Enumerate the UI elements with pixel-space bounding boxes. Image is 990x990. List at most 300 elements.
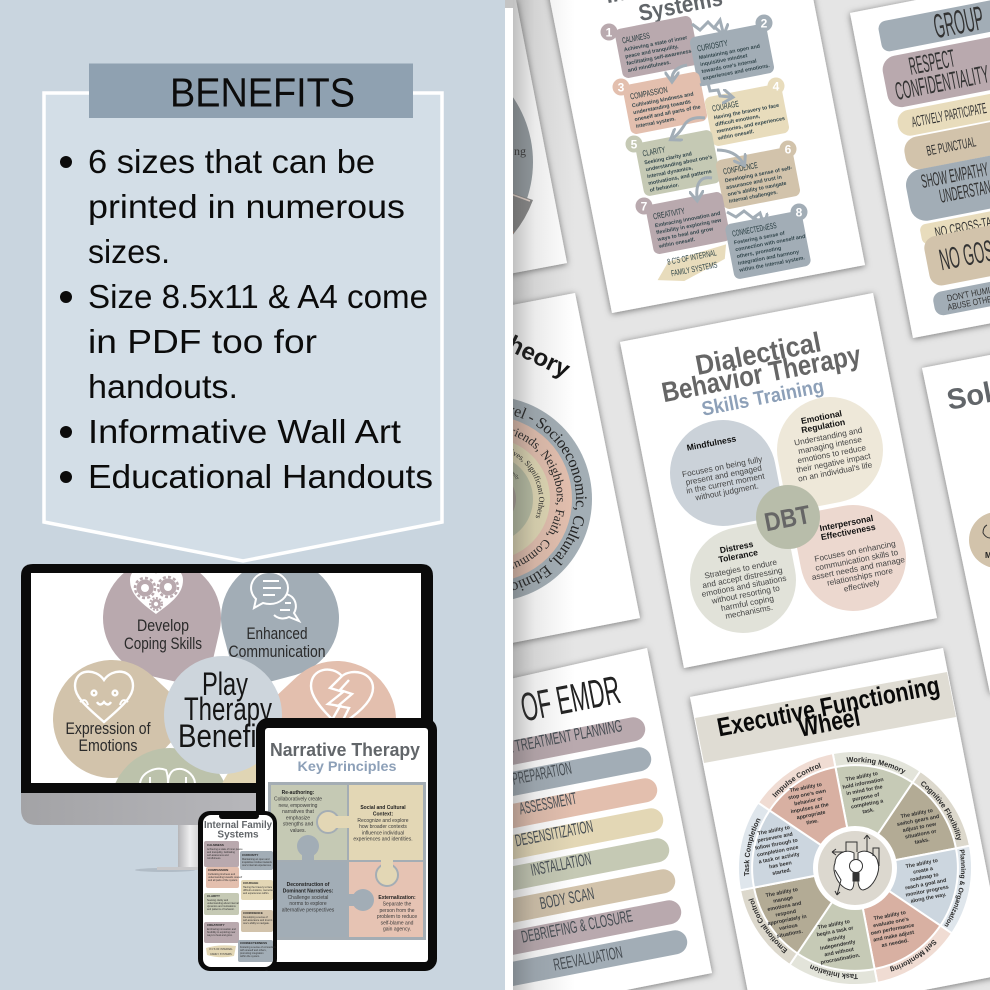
wedge text: impulse control: behavior or [794,796,823,807]
label: enhanced communication: Communication [228,643,326,661]
ring labels: Self Monitoring [890,940,936,972]
card 8 connectedness [724,210,812,280]
card 3 compassion: understanding towards [633,99,691,116]
phone cards: Having the bravery to face [243,886,273,889]
petal: interpersonal effectiveness: effectively [843,578,881,594]
bar labels: INSTALLATION [529,849,593,880]
brush caption: FAMILY SYSTEMS [670,259,718,278]
shield outline box [44,93,442,561]
card 1 calmness [616,16,695,78]
panel: benefits [0,0,505,990]
poster: wheel fragment top left [513,0,571,278]
wedge text: impulse control: time. [806,818,820,827]
card 6 confidence: one's ability to navigate [727,181,787,198]
petal: distress tolerance: mechanisms. [724,603,774,621]
text: deconstruction [282,882,335,914]
phone cards: CURIOSITY [242,853,258,857]
phone cards: Achieving a state of inner peace [207,848,243,851]
label: enhanced communication [229,627,325,657]
phone cards: and experiences within. [243,892,269,895]
icon: brain [140,769,195,783]
label: expression of emotions: Expression of [66,720,151,738]
label: play therapy benefits: Benefits [178,718,278,754]
icon: broken heart [311,670,373,722]
phone title: Internal Family [204,820,272,831]
text: social and cultural context: experiences and identities. [353,836,413,842]
wedge text: impulse control: The ability to [789,782,823,794]
number badges: 5 [631,138,638,152]
card 4 courage: memories, and experiences [716,116,786,135]
text: deconstruction: alternative perspectives [282,908,335,914]
wedge text: emotional control: emotions and [767,901,802,913]
text: externalization: gain agency. [383,926,411,932]
petal: interpersonal effectiveness [791,496,915,620]
ring labels: Impulse Control [772,762,821,798]
bar: be punctual [904,122,990,170]
phone cards: Fostering a sense of connection [240,946,276,949]
phone cards: within the system. [240,955,260,958]
heading: benefits: BENEFITS [170,70,355,116]
wedge text: planning and organization: create a [913,866,934,876]
wedge text: impulse control: stop one's own [788,788,827,801]
label: develop coping skills [124,617,202,653]
wedge text: impulse control [786,781,832,829]
text: deconstruction: Challenge societal [288,895,328,901]
wedge text: self monitoring: own performance [870,923,915,937]
phone cards: CONNECTEDNESS [240,941,267,945]
bullet list: Size 8.5x11 & A4 come [88,278,428,315]
wedge text: working memory: hold information [842,777,884,791]
wedge text: task completion: persevere and [757,832,793,844]
phone cards: FAMILY SYSTEMS [210,953,232,956]
icon: smiling heart [75,672,133,722]
wedge text: task initiation: independently [820,939,856,952]
phone cards: mindfulness. [207,857,221,860]
tan circle [969,512,990,568]
card 6 confidence: assurance and trust in [726,174,782,191]
phone cards: with oneself and others, [240,949,267,952]
label: play therapy benefits [180,672,272,748]
poster title: Executive Functioning [714,670,942,742]
phone cards: Embracing innovation and [207,928,237,931]
poster: solution fragment [922,334,990,693]
card 1 calmness: and mindfulness. [627,60,672,74]
wheel [739,752,971,984]
petal: emotional regulation: on an individual's life [797,460,873,484]
bar labels: DEBRIEFING & CLOSURE [520,906,634,947]
bar labels: PREPARATION [511,759,573,789]
card 2 curiosity [689,23,775,87]
petal: interpersonal effectiveness: relationships more [826,566,894,588]
phone cards: self-assurance and trust in [243,919,273,922]
card 8 connectedness: connection with oneself and [735,234,806,253]
petal: mindfulness: in the current moment [685,471,766,496]
text: re-authoring: Collaboratively create [274,796,322,802]
concentric rings: Relatives, Significant Others [513,450,544,518]
poster: theory fragment [513,290,644,648]
ring labels [744,756,966,980]
phone cards [204,841,276,962]
card 7 creativity: CREATIVITY [652,205,686,221]
text: re-authoring [274,790,322,834]
phone cards: understanding towards oneself [208,876,242,879]
phone cards: understanding about internal [207,902,239,905]
poster title: Dialectical [693,326,823,381]
card 6 confidence: internal challenges. [728,189,779,205]
ring labels: Planning & Organization [944,850,966,927]
phone cards: flexibility in exploring new [207,931,235,934]
text: re-authoring: narratives that [282,809,314,815]
label: play therapy benefits: Play [202,666,248,702]
petal: distress tolerance: harmful coping [720,594,775,613]
bar: assessment [439,776,659,842]
mockup: phone with internal family systems [198,811,277,971]
phone cards: and patterns of behavior. [207,908,235,911]
number badges: 6 [785,142,792,156]
concentric rings: Level - Socioeconomic, Cultural, Ethnic, [513,407,587,591]
wedge text: task initiation: and without [824,947,855,958]
brush caption: 8 C'S OF INTERNAL [666,247,718,267]
label: develop coping skills: Develop [137,617,189,635]
wedge text: task initiation: activity [827,934,846,943]
edge shading [513,0,575,990]
bar: actively participate [898,94,990,136]
bullet list: printed in numerous [88,188,405,225]
phone cards: inquisitive mindset towards [242,861,273,864]
bar: debriefing [463,898,683,964]
bullet list: sizes. [88,233,170,270]
wedge text: emotional control: various [779,923,798,932]
text: social and cultural context: Recognize and explore [357,818,409,824]
label: expression of emotions [66,722,151,751]
wedge text: planning and organization: roadmap to [910,872,940,883]
wedge text: emotional control: situations. [776,929,804,940]
card 7 creativity: within oneself. [657,237,696,250]
wedge text: emotional control [762,886,810,941]
phone cards: Maintaining an open and [242,858,270,861]
petal: mindfulness [661,411,785,535]
theory title: Theory [490,324,575,384]
text: social and cultural context: Social and Cultural [360,805,406,811]
card 7 creativity: Embracing innovation and [654,211,721,229]
text: deconstruction: norms to explore [289,901,327,907]
wedge text: cognitive flexibility: adjust to new [902,821,938,834]
tablet title: Key Principles [298,758,397,774]
phone cards: COURAGE [243,881,258,885]
petal: interpersonal effectiveness: communication skills to [815,548,899,573]
label: enhanced communication: Enhanced [246,625,308,643]
phone cards: dynamics and motivations [207,905,237,908]
wedge text: task initiation: procrastination. [820,953,861,966]
bar: don't humiliate [933,282,990,316]
text: externalization: Externalization: [378,895,416,901]
bar: preparation [433,745,653,811]
petal: emotional regulation: Emotional [800,408,843,426]
wedge text: cognitive flexibility: situations or [905,829,937,841]
phone cards: self-awareness and [207,854,229,857]
card 5 clarity: Seeking clarity and [644,151,692,166]
phone cards: Developing a sense of [243,916,268,919]
center badge: DBT: DBT [762,499,813,537]
petal: distress tolerance: and accept distressing [702,566,784,590]
card 3 compassion: Cultivating kindness and [631,91,694,109]
petal: mindfulness: Focuses on being fully [681,455,764,479]
card 6 confidence: Developing a sense of self- [724,165,793,184]
text: re-authoring: new, empowering [279,803,318,809]
wedge text: planning and organization: along the way. [910,892,947,905]
card 6 confidence: CONFIDENCE [722,160,759,176]
number badges: 1 [606,26,613,40]
card 4 courage: COURAGE [711,98,740,113]
number badges: 7 [641,200,648,214]
text: deconstruction: Deconstruction of [287,882,330,888]
hub [813,826,897,910]
card 1 calmness: CALMNESS [621,30,651,45]
wedge text: self monitoring: evaluate one's [873,916,910,929]
wedge text: working memory: completing a [851,798,884,811]
wedge text: emotional control: The ability to [765,887,799,899]
flow arrows [672,20,763,222]
label: develop coping skills: Coping Skills [124,635,202,653]
text: externalization: self-blame and [381,920,414,926]
wedge text: task completion: started. [772,867,792,877]
card 3 compassion: COMPASSION [629,84,668,101]
text: re-authoring: strengths and [283,822,313,828]
text: social and cultural context: influence individual [362,830,404,836]
wedge text: planning and organization: The ability to [905,858,939,870]
wedge text: planning and organization: reach a goal and [905,878,947,892]
card 5 clarity: motivations, and patterns [648,169,712,187]
card 4 courage: difficult emotions, [715,113,761,128]
card 8 connectedness: within the internal system. [738,255,806,274]
label: play therapy benefits: Therapy [184,691,272,727]
bar labels: BODY SCAN [538,884,596,913]
card 2 curiosity: CURIOSITY [696,38,729,53]
wedge text: self monitoring: and make adjust [873,930,915,944]
wedge text: task completion: has been [769,860,792,871]
phone cards: CLARITY [207,894,220,898]
wedge text: cognitive flexibility: The ability to [900,808,934,820]
petal: interpersonal effectiveness: Focuses on enhancing [814,539,897,564]
concentric rings: Siblings, Family [513,472,519,480]
wedge text: task initiation: The ability to [817,919,851,931]
petal: interpersonal effectiveness: Effectiveness [820,522,877,542]
wedge text: task completion: a task or activity [758,852,800,865]
mockup: desktop monitor with play therapy benefits [21,546,433,872]
card 4 courage: Having the bravery to face [713,103,780,121]
phone cards: one's ability to navigate. [243,922,270,925]
petal: emotional regulation: emotions to reduce [797,443,867,465]
center badge: DBT [756,485,820,549]
petal: interpersonal effectiveness: assert needs and manage [811,555,906,582]
bar labels: HISTORY & TREATMENT PLANNING [461,716,624,766]
card 4 courage: within oneself. [716,129,755,142]
card 1 calmness: facilitating self-awareness [626,49,692,67]
card 7 creativity: ways to heal and grow [656,226,715,243]
wedge text: working memory: The ability to [845,771,879,783]
text: externalization [377,895,417,932]
text: re-authoring: emphasize [286,816,310,822]
label: expression of emotions: Emotions [78,737,138,755]
card 7 creativity [645,191,731,255]
card 5 clarity: understanding about one's [645,154,713,173]
bullet list: Educational Handouts [88,458,433,495]
wedge text: task completion: completion once [757,845,799,859]
phone cards: and all parts of the system. [208,879,238,882]
text: externalization: problem to reduce [377,914,417,920]
petal: distress tolerance: Tolerance [718,547,759,565]
phone cards: CONFIDENCE [243,911,263,915]
bar labels [461,716,634,975]
card 7 creativity: flexibility in exploring new [656,217,723,236]
brush caption [658,244,726,281]
outer ring segments [738,751,972,985]
phone cards: Cultivating kindness and [208,873,236,876]
ring labels: Emotional Control [748,898,788,954]
petal: distress tolerance: Strategies to endure [704,558,778,581]
wedge text: working memory [841,770,890,818]
card 2 curiosity: Maintaining an open and [698,44,761,61]
petal: emotional regulation: Understanding and [793,426,864,448]
card 3 compassion: oneself and all parts of the [634,104,701,123]
text: re-authoring: Re-authoring: [282,790,315,796]
bullet list: handouts. [88,368,238,405]
wedge text: working memory: in mind for the [846,784,883,797]
bar: no gossip [924,225,990,286]
card 4 courage [704,83,790,147]
petal: emotional regulation: managing intense [797,435,863,456]
phone cards: ways to heal and grow. [207,934,233,937]
concentric rings: Friends, Neighbors, Faith, Community [513,428,564,569]
petal: mindfulness: present and engaged [685,463,763,487]
wedge text: cognitive flexibility [895,807,944,849]
wedge text: emotional control: manage [773,895,794,905]
puzzle diagram [268,782,426,940]
number badges: 2 [761,16,768,30]
wedge text: emotional control: respond [775,909,797,919]
wedge text: task completion: follow through to [755,838,799,852]
inner wedges [752,765,958,971]
petal: emotional regulation: their negative impact [795,451,872,475]
bullet list: in PDF too for [88,323,317,360]
card 2 curiosity: experiences and emotions. [702,63,771,82]
wedge text: planning and organization [900,857,951,906]
icon: speech bubbles [251,572,299,621]
ring labels: Cognitive Flexibility [921,781,962,840]
number badges: 4 [773,80,780,94]
card 8 connectedness: integration and harmony [738,249,800,267]
poster title: Wheel [796,702,863,743]
bar labels: DESENSITIZATION [513,817,595,850]
poster: wheel fragment top left: ng [514,144,526,158]
text: social and cultural context: how broader contexts [359,824,407,830]
petal: mindfulness: without judgment. [694,481,759,503]
phone cards: promoting integration [240,952,264,955]
bar: treatment planning [427,715,647,781]
icon: heart with gears [130,573,183,614]
bullet list [60,143,433,495]
card 5 clarity: internal dynamics, [647,165,694,180]
number badges [600,14,808,220]
card 2 curiosity: towards one's internal [701,58,758,75]
poster title: OF EMDR [517,668,624,730]
bar: reevaluation [469,928,689,990]
petal: distress tolerance: emotions and situations [701,574,787,599]
heading: benefits [89,64,413,118]
wedge text: task completion: The ability to [757,825,791,837]
bullet list: 6 sizes that can be [88,143,375,180]
bullet list: Informative Wall Art [88,413,401,450]
phone cards: COMPASSION [208,868,228,872]
wedge text: self monitoring: The ability to [873,910,907,922]
phone cards: and tranquility, facilitating [207,851,235,854]
tablet title: Narrative Therapy [270,740,420,760]
ring labels: Working Memory [846,756,906,774]
card 6 confidence [715,146,801,210]
wedge text: planning and organization: monitor progress [905,884,949,899]
card 2 curiosity: inquisitive mindset [700,53,748,68]
poster: group rules [850,0,990,338]
card 3 compassion [622,71,708,135]
text: re-authoring: values. [290,828,306,834]
phone cards: 8 C'S OF INTERNAL [209,948,233,951]
bar: installation [451,836,671,902]
poster: internal family systems [546,0,865,313]
card 1 calmness: peace and tranquility, [625,44,680,60]
number badges: 8 [796,206,803,220]
wedge text: self monitoring [868,909,917,951]
panel: poster collage [513,0,990,990]
bar: body scan [457,867,677,933]
wedge text: emotional control: appropriately in [767,914,807,927]
phone cards: Seeking clarity and [207,899,229,902]
wedge text: task initiation [814,918,861,966]
poster title: Skills Training [700,375,826,421]
wedge text: working memory: purpose of [852,792,880,803]
text: externalization: person from the [379,908,415,914]
card 8 connectedness: others, promoting [736,246,782,260]
petal: mindfulness: Mindfulness [686,433,737,453]
phone cards: one's internal experiences [242,864,272,867]
phone cards: CALMNESS [207,843,224,847]
poster: executive functioning wheel [686,645,990,990]
bar: no cross-talk [920,211,990,244]
ring labels: Task Initiation [810,964,858,980]
poster title: Behavior Therapy [659,339,864,408]
poster: dialectical behavior therapy [620,293,937,668]
card 5 clarity [635,129,721,197]
card 5 clarity: CLARITY [642,144,666,158]
bar: show empathy [906,156,990,221]
bar: desensitization [445,806,665,872]
number badges: 3 [618,80,625,94]
ring labels: Task Completion [744,818,761,876]
petal: interpersonal effectiveness: Interpersonal [819,513,874,533]
poster: phases of EMDR [427,648,712,990]
poster title [608,0,722,22]
text: social and cultural context: Context: [373,812,393,818]
phone cards: difficult emotions, memories [243,889,275,892]
wedge text: impulse control: appropriate [796,810,826,821]
petal: distress tolerance: Distress [719,539,754,555]
bar labels: REEVALUATION [552,943,624,975]
wedge text: task initiation: begin a task or [816,925,854,938]
phone cards: CREATIVITY [207,923,225,927]
card 8 connectedness: CONNECTEDNESS [731,220,777,239]
bar: group [878,0,990,52]
wedge text: working memory: task. [862,807,876,815]
text: externalization: Separate the [383,902,412,908]
